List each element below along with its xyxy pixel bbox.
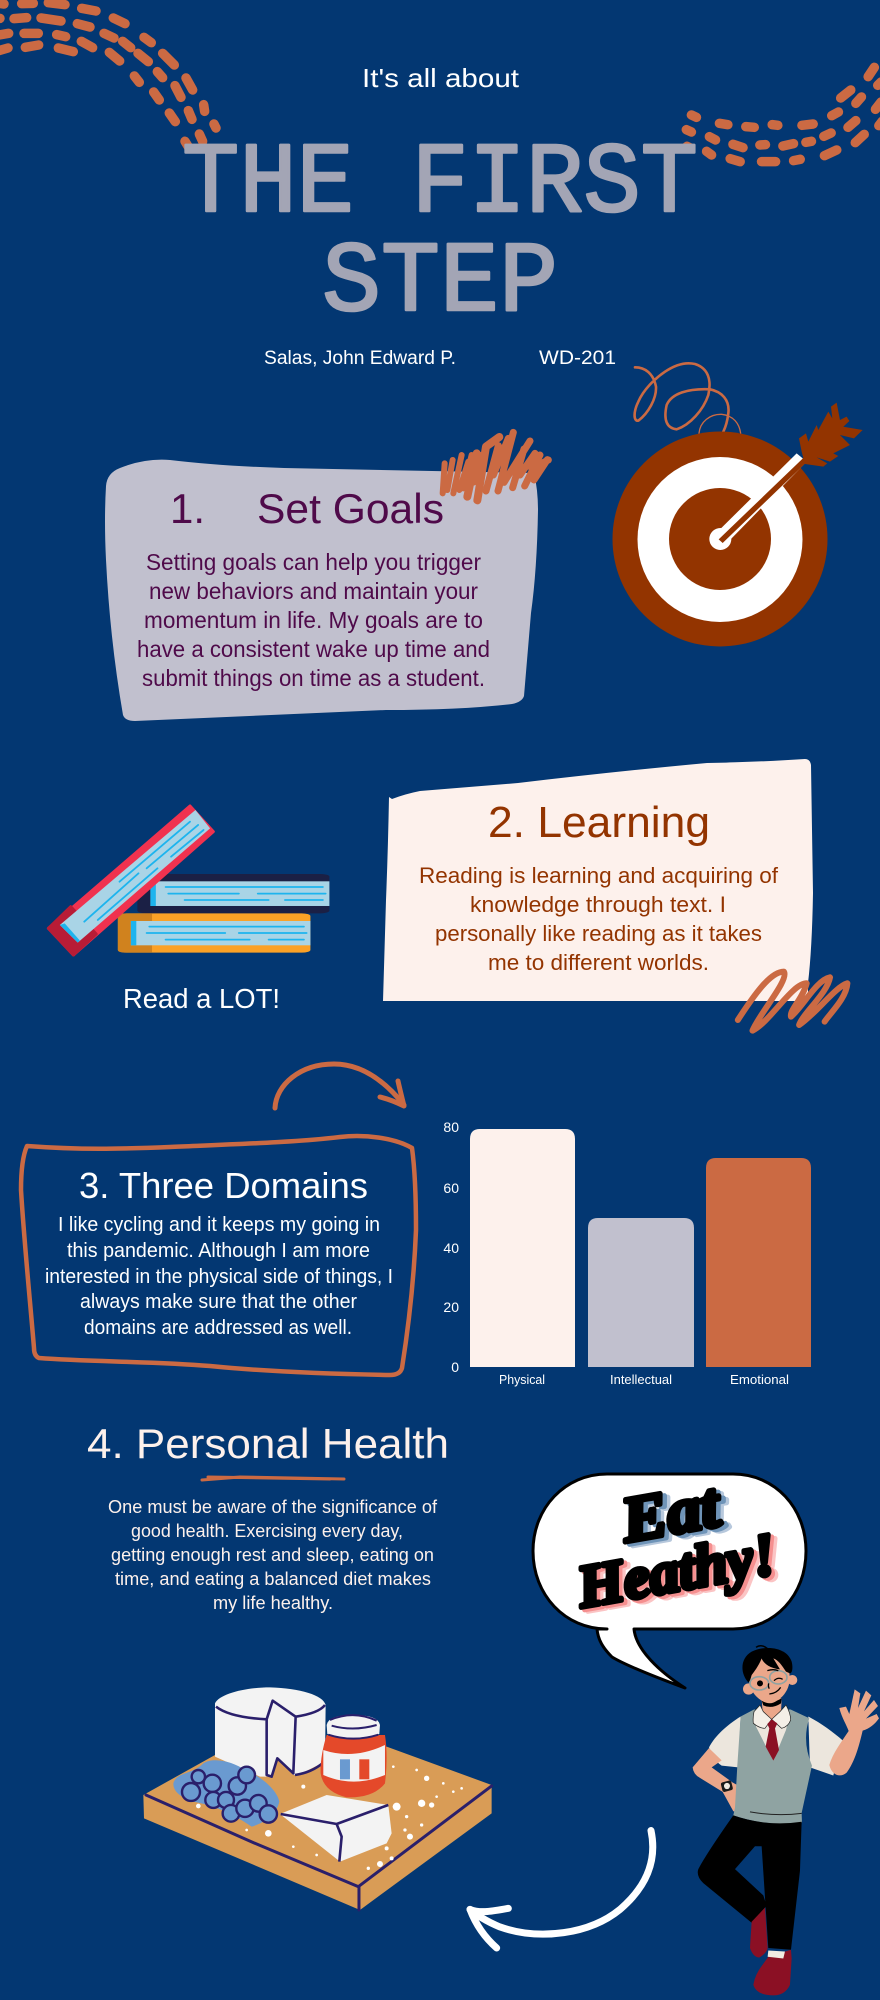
left arm and hand xyxy=(693,1748,756,1813)
panel: three domains xyxy=(21,1136,416,1375)
neck xyxy=(762,1698,782,1720)
brie wedge xyxy=(280,1795,392,1862)
body text: personally like reading as it takes xyxy=(435,921,762,946)
wink and smile xyxy=(767,1670,783,1694)
sleeves xyxy=(709,1717,741,1767)
body text: my life healthy. xyxy=(213,1593,333,1613)
hand-drawn frame xyxy=(21,1136,416,1375)
bar: emotional xyxy=(706,1158,811,1367)
lettering: Eat: Eat xyxy=(615,1468,727,1556)
illustration: waving student xyxy=(693,1646,879,1995)
glasses xyxy=(750,1677,769,1690)
eye xyxy=(757,1680,763,1686)
cheese wheel xyxy=(215,1687,326,1777)
heading: 3. Three Domains xyxy=(79,1165,368,1206)
books caption: Read a LOT! xyxy=(123,983,280,1014)
icon: target with arrow xyxy=(612,363,863,646)
outer ring xyxy=(612,432,828,646)
ears xyxy=(743,1683,754,1695)
panel: personal health xyxy=(87,1420,449,1613)
title: STEP xyxy=(322,228,558,341)
shirt front xyxy=(754,1713,790,1761)
panel: learning xyxy=(383,759,847,1031)
lettering: Eat: Eat xyxy=(623,1472,735,1560)
arrow: curved orange xyxy=(275,1064,404,1108)
y axis labels: 60 xyxy=(443,1180,459,1196)
decorative dashes: top right band xyxy=(686,67,880,162)
title: THE FIRST xyxy=(182,129,698,242)
bar: intellectual xyxy=(588,1218,694,1367)
body text: new behaviors and maintain your xyxy=(149,578,478,604)
bubble shape xyxy=(533,1474,806,1688)
lettering: Heathy: Heathy! xyxy=(571,1520,781,1620)
heading: 2. Learning xyxy=(488,798,710,847)
body text: Setting goals can help you trigger xyxy=(146,549,481,575)
illustration: cheese board xyxy=(143,1687,492,1910)
body xyxy=(693,1710,843,1995)
face xyxy=(749,1657,790,1703)
body text xyxy=(419,863,779,975)
body text: domains are addressed as well. xyxy=(84,1316,352,1339)
card background xyxy=(105,460,538,721)
board xyxy=(143,1747,492,1910)
panel: set goals xyxy=(105,432,548,721)
title xyxy=(182,129,698,341)
red book xyxy=(48,806,213,955)
underline xyxy=(202,1477,344,1480)
trousers xyxy=(698,1815,802,1950)
body text: I like cycling and it keeps my going in xyxy=(58,1213,380,1236)
intro line: It's all about xyxy=(362,63,520,93)
lettering: Heathy: Heathy! xyxy=(575,1523,784,1623)
body text: good health. Exercising every day, xyxy=(131,1521,403,1541)
speech bubble xyxy=(533,1467,806,1688)
x axis labels: Emotional xyxy=(730,1372,789,1387)
body text xyxy=(108,1497,438,1613)
heading: 4. Personal Health xyxy=(87,1420,449,1467)
body text: me to different worlds. xyxy=(488,950,709,975)
body text: One must be aware of the significance of xyxy=(108,1497,438,1517)
collar xyxy=(753,1705,791,1728)
speckles xyxy=(196,1765,463,1870)
y axis labels: 80 xyxy=(443,1119,459,1135)
scribble xyxy=(443,432,548,500)
body text: interested in the physical side of things, I xyxy=(45,1265,393,1288)
y axis labels: 0 xyxy=(451,1359,459,1375)
lettering: Eat: Eat xyxy=(619,1471,731,1558)
jam jar xyxy=(321,1715,387,1797)
right arm and hand xyxy=(829,1689,879,1775)
section code: WD-201 xyxy=(539,348,616,369)
author name: Salas, John Edward P. xyxy=(264,348,456,369)
body text xyxy=(45,1213,393,1339)
body text: this pandemic. Although I am more xyxy=(67,1239,370,1262)
bar chart xyxy=(443,1119,811,1387)
x axis labels xyxy=(499,1372,789,1387)
waistband line xyxy=(750,1812,802,1815)
upper body xyxy=(742,1646,879,1775)
card background xyxy=(383,759,813,1001)
heading: Set Goals xyxy=(257,485,444,532)
y axis labels: 20 xyxy=(443,1299,459,1315)
board edges xyxy=(146,1786,492,1910)
white ring xyxy=(638,457,802,622)
x axis labels: Intellectual xyxy=(610,1372,672,1387)
lettering: Heathy: Heathy! xyxy=(578,1524,788,1624)
heading xyxy=(170,485,444,532)
loop scribble xyxy=(635,363,741,433)
navy book xyxy=(137,874,329,913)
scribble xyxy=(738,972,847,1031)
body text: knowledge through text. I xyxy=(470,892,726,917)
tie xyxy=(766,1719,779,1761)
grapes xyxy=(173,1760,279,1827)
arrow xyxy=(709,403,863,550)
orange book xyxy=(118,913,310,953)
y axis labels: 40 xyxy=(443,1240,459,1256)
body text: getting enough rest and sleep, eating on xyxy=(111,1545,434,1565)
body text: have a consistent wake up time and xyxy=(137,636,490,662)
bullseye xyxy=(669,488,771,590)
body text: time, and eating a balanced diet makes xyxy=(115,1569,431,1589)
arrow: curved white xyxy=(470,1831,653,1948)
body text xyxy=(137,549,490,691)
icon: stack of books xyxy=(48,806,329,955)
body text: momentum in life. My goals are to xyxy=(144,607,483,633)
heading: 1. xyxy=(170,485,205,532)
y axis labels xyxy=(443,1119,459,1375)
body text: always make sure that the other xyxy=(80,1290,357,1313)
body text: Reading is learning and acquiring of xyxy=(419,863,779,888)
hair xyxy=(742,1648,792,1682)
shoes xyxy=(750,1908,768,1957)
vest xyxy=(733,1710,812,1824)
decorative dashes: top left band xyxy=(0,3,216,147)
x axis labels: Physical xyxy=(499,1372,545,1387)
bar: physical xyxy=(470,1129,575,1367)
body text: submit things on time as a student. xyxy=(142,665,485,691)
